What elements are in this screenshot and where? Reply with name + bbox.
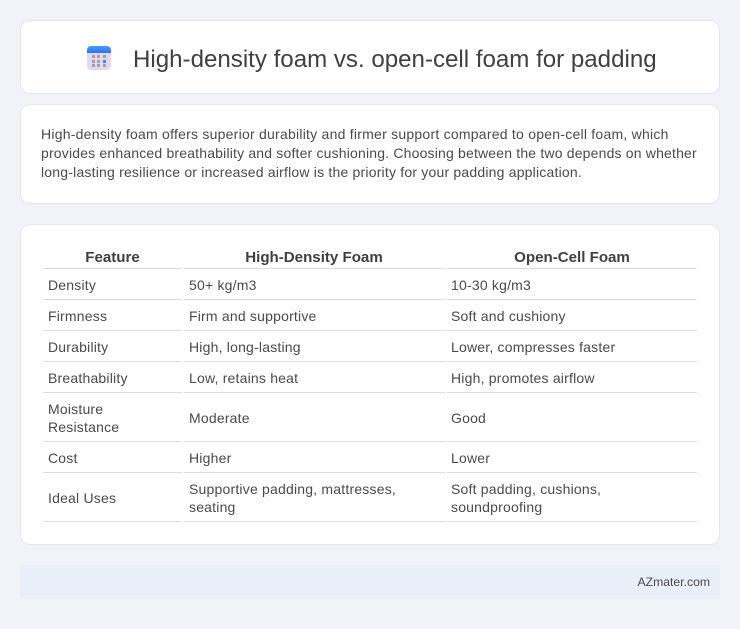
row: breathability: Low, retains heat [189,370,298,386]
comparison table [43,249,697,522]
row: firmness [48,308,566,324]
row: breathability: High, promotes airflow [451,370,595,386]
icon: calendar [87,46,111,70]
row: moisture resistance: Moderate [189,410,250,426]
row: cost: Higher [189,450,231,466]
row: durability: High, long-lasting [189,339,301,355]
intro text: provides enhanced breathability and softer cushioning. Choosing between the two depends on whether [41,145,697,161]
row: density: Density [48,277,96,293]
row: durability [48,339,615,355]
title: High-density foam vs. open-cell foam for padding [133,46,657,73]
footer source text: AZmater.com [638,575,710,589]
footer bar [20,565,720,599]
intro text [41,126,697,180]
row: density: 10-30 kg/m3 [451,277,531,293]
row: firmness: Soft and cushiony [451,308,566,324]
row: ideal uses: Soft padding, cushions, [451,481,601,497]
row: firmness: Firm and supportive [189,308,317,324]
row: moisture resistance: Moisture [48,401,103,417]
intro text: High-density foam offers superior durability and firmer support compared to open-cell foam, which [41,126,669,142]
row: density: 50+ kg/m3 [189,277,257,293]
table header row: Open-Cell Foam [514,249,630,266]
row: moisture resistance [48,401,486,435]
table header row [85,249,630,266]
table header row: Feature [85,249,140,266]
header panel [20,20,720,94]
row: ideal uses: seating [189,499,236,515]
row: moisture resistance: Resistance [48,419,119,435]
row: cost: Cost [48,450,78,466]
row: cost: Lower [451,450,490,466]
intro panel [20,104,720,204]
row: breathability [48,370,595,386]
row: ideal uses: Supportive padding, mattresses, [189,481,396,497]
intro text: long-lasting resilience or increased airflow is the priority for your padding application. [41,164,582,180]
row: firmness: Firmness [48,308,107,324]
row: durability: Durability [48,339,108,355]
row: cost [48,450,490,466]
table panel [20,224,720,545]
row: ideal uses: soundproofing [451,499,542,515]
row: ideal uses: Ideal Uses [48,490,116,506]
row: ideal uses [48,481,601,515]
row: moisture resistance: Good [451,410,486,426]
row: durability: Lower, compresses faster [451,339,615,355]
row: density [48,277,531,293]
row: breathability: Breathability [48,370,128,386]
table header row: High-Density Foam [245,249,383,266]
